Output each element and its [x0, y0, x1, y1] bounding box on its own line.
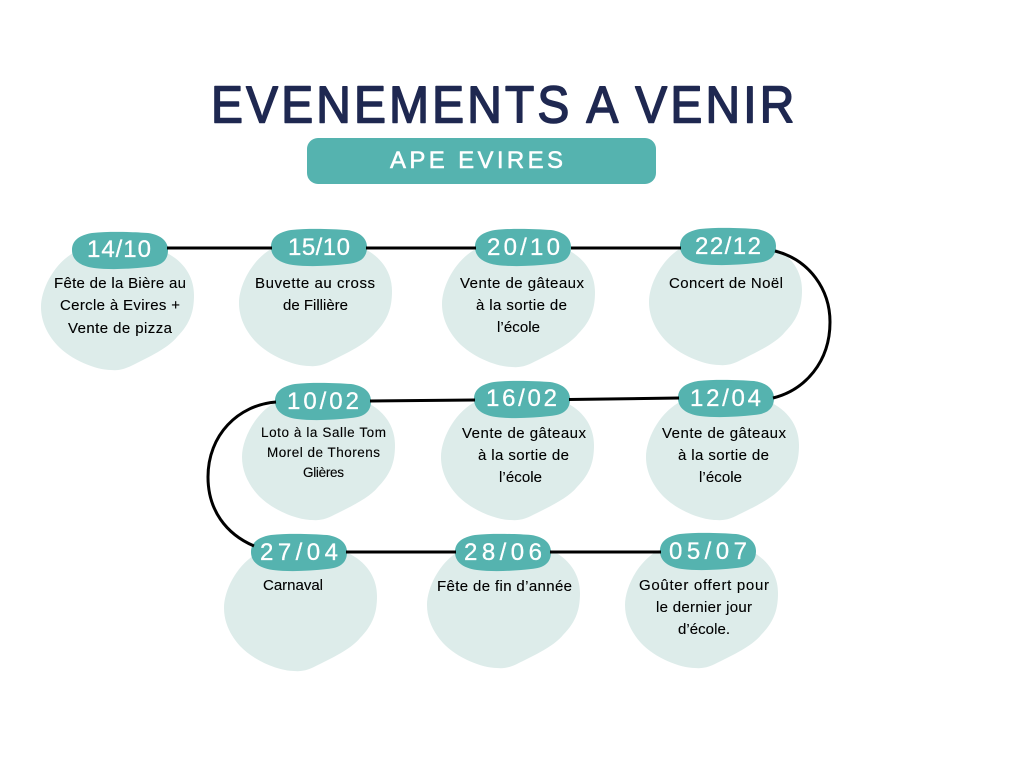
event 2: 15/10: Buvette au cross — [255, 275, 375, 292]
event 2: 15/10: 15/10 — [288, 234, 350, 261]
subtitle banner: APE EVIRES — [390, 147, 563, 174]
event 7: 12/04: à la sortie de — [678, 447, 769, 464]
event 7: 12/04: Vente de gâteaux — [662, 425, 786, 442]
event 8: 27/04: Carnaval — [263, 577, 323, 594]
event 3: 20/10: l’école — [497, 319, 540, 336]
title: EVENEMENTS A VENIR — [211, 76, 794, 134]
event 10: 05/07: 05/07 — [669, 538, 747, 565]
event 2: 15/10 — [239, 229, 392, 366]
event 6: 16/02: Vente de gâteaux — [462, 425, 586, 442]
event 10: 05/07: d’école. — [678, 621, 730, 638]
event 1: 14/10: Vente de pizza — [68, 320, 173, 337]
event 9: 28/06 — [427, 534, 580, 668]
event 6: 16/02: 16/02 — [486, 385, 557, 412]
event 8: 27/04 — [224, 534, 377, 671]
event 4: 22/12: Concert de Noël — [669, 275, 783, 292]
event 3: 20/10: Vente de gâteaux — [460, 275, 584, 292]
subtitle banner — [307, 138, 656, 184]
event 10: 05/07: le dernier jour — [656, 599, 752, 616]
event 4: 22/12: 22/12 — [695, 233, 761, 260]
event 3: 20/10: 20/10 — [487, 234, 560, 261]
event 5: 10/02: 10/02 — [287, 388, 359, 415]
event 4: 22/12 — [649, 228, 802, 365]
event 5: 10/02: Morel de Thorens — [267, 445, 380, 460]
event 10: 05/07 — [625, 533, 778, 668]
event 1: 14/10: 14/10 — [87, 236, 151, 263]
event 6: 16/02: l’école — [499, 469, 542, 486]
event 7: 12/04: l’école — [699, 469, 742, 486]
event 1: 14/10: Fête de la Bière au — [54, 275, 186, 292]
event 6: 16/02: à la sortie de — [478, 447, 569, 464]
event 10: 05/07: Goûter offert pour — [639, 577, 769, 594]
event 1: 14/10 — [41, 232, 194, 370]
event 6: 16/02 — [441, 381, 594, 520]
event 5: 10/02: Glières — [303, 465, 344, 480]
event 9: 28/06: 28/06 — [464, 539, 542, 566]
event 3: 20/10 — [442, 229, 595, 367]
event 1: 14/10: Cercle à Evires + — [60, 297, 180, 314]
event 3: 20/10: à la sortie de — [476, 297, 567, 314]
event 8: 27/04: 27/04 — [260, 539, 338, 566]
event 5: 10/02 — [242, 383, 395, 520]
timeline connector line — [167, 248, 830, 552]
event 5: 10/02: Loto à la Salle Tom — [261, 425, 386, 440]
event 7: 12/04 — [646, 380, 799, 520]
event 2: 15/10: de Fillière — [283, 297, 348, 314]
event 9: 28/06: Fête de fin d’année — [437, 578, 572, 595]
event 7: 12/04: 12/04 — [690, 385, 761, 412]
